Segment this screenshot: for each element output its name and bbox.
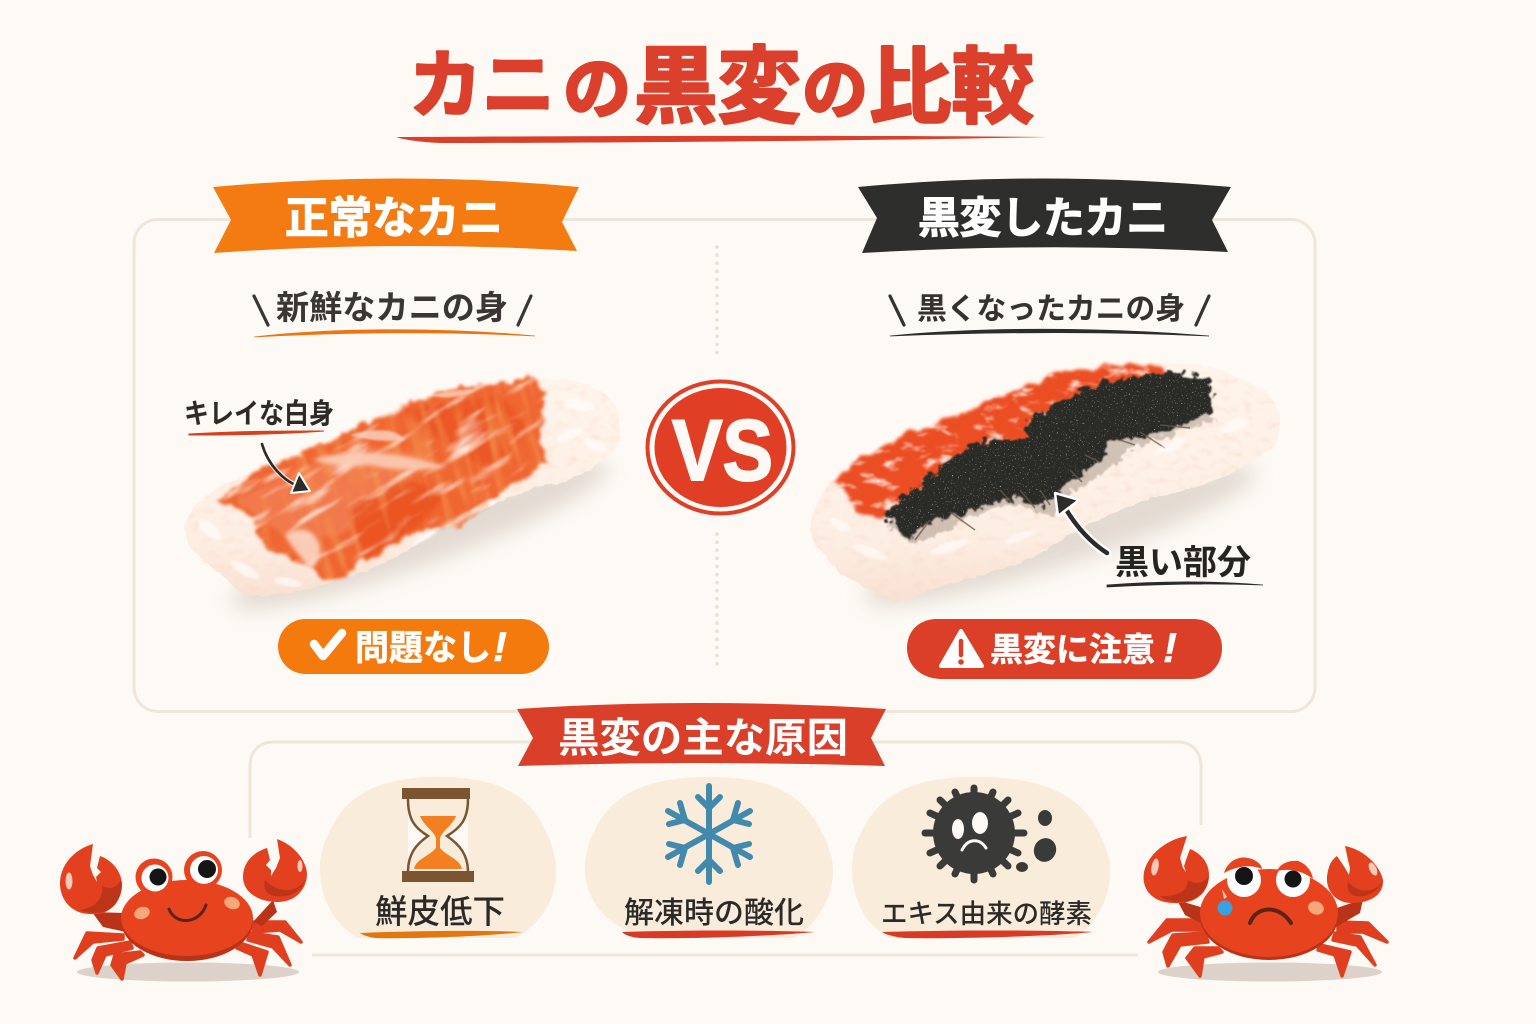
subheading: fresh crab meat	[254, 289, 535, 337]
banner: main causes: 黒変の主な原因	[558, 715, 848, 761]
mascot: sad crab	[1144, 836, 1387, 982]
arrow: to black part	[1055, 493, 1107, 553]
icon: snowflake	[668, 786, 750, 882]
callout: clean white meat	[184, 398, 334, 493]
photo: normal crab meat	[184, 372, 620, 616]
mascot: happy crab	[60, 839, 307, 982]
photo: blackened crab meat	[805, 355, 1285, 627]
callout: black part	[1055, 493, 1263, 587]
centre dotted divider	[715, 247, 719, 665]
banner: normal crab	[213, 178, 579, 253]
subheading: blackened crab meat: 黒くなったカニの身	[917, 293, 1185, 326]
rice-like flakes at ends	[195, 396, 609, 588]
status pill: beware: 黒変に注意	[990, 631, 1155, 668]
black discoloured band	[883, 368, 1218, 544]
cause card: enzymes from extract	[852, 777, 1110, 938]
VS badge	[648, 382, 794, 514]
banner: blackened crab: 黒変したカニ	[918, 195, 1168, 243]
VS badge: VS	[672, 403, 773, 499]
status pill: beware: !	[1163, 624, 1177, 671]
cause card: loss of freshness	[320, 777, 556, 938]
title	[396, 40, 1048, 143]
title: カニ	[409, 44, 555, 127]
status pill: no problem: !	[493, 623, 507, 670]
banner: blackened crab	[858, 178, 1231, 253]
arrow: to white meat	[262, 444, 310, 493]
title: の	[563, 52, 631, 128]
icon: germ	[925, 788, 1060, 880]
title: 黒変	[634, 40, 801, 134]
icon: hourglass	[402, 788, 474, 882]
banner: normal crab: 正常なカニ	[285, 194, 503, 243]
rice-like flakes	[827, 414, 1251, 563]
causes panel frame	[250, 742, 1201, 955]
red shell remnant	[830, 360, 1167, 521]
status pill: beware	[907, 619, 1222, 679]
status pill: no problem	[278, 619, 549, 674]
callout: clean white meat: キレイな白身	[184, 398, 334, 429]
status pill: no problem: 問題なし	[355, 629, 491, 668]
cause card: enzymes from extract: エキス由来の酵素	[881, 899, 1092, 929]
title underline	[396, 136, 1048, 143]
title: の	[802, 53, 868, 127]
banner: main causes	[517, 703, 886, 766]
cause card: loss of freshness: 鮮皮低下	[375, 893, 505, 930]
cause card: oxidation on thawing	[585, 777, 833, 938]
subheading: blackened crab meat	[890, 293, 1209, 336]
title: 比較	[869, 41, 1034, 134]
cause card: oxidation on thawing: 解凍時の酸化	[624, 897, 804, 930]
callout: black part: 黒い部分	[1115, 544, 1251, 582]
comparison panel frame	[134, 220, 1315, 712]
subheading: fresh crab meat: 新鮮なカニの身	[276, 289, 508, 326]
